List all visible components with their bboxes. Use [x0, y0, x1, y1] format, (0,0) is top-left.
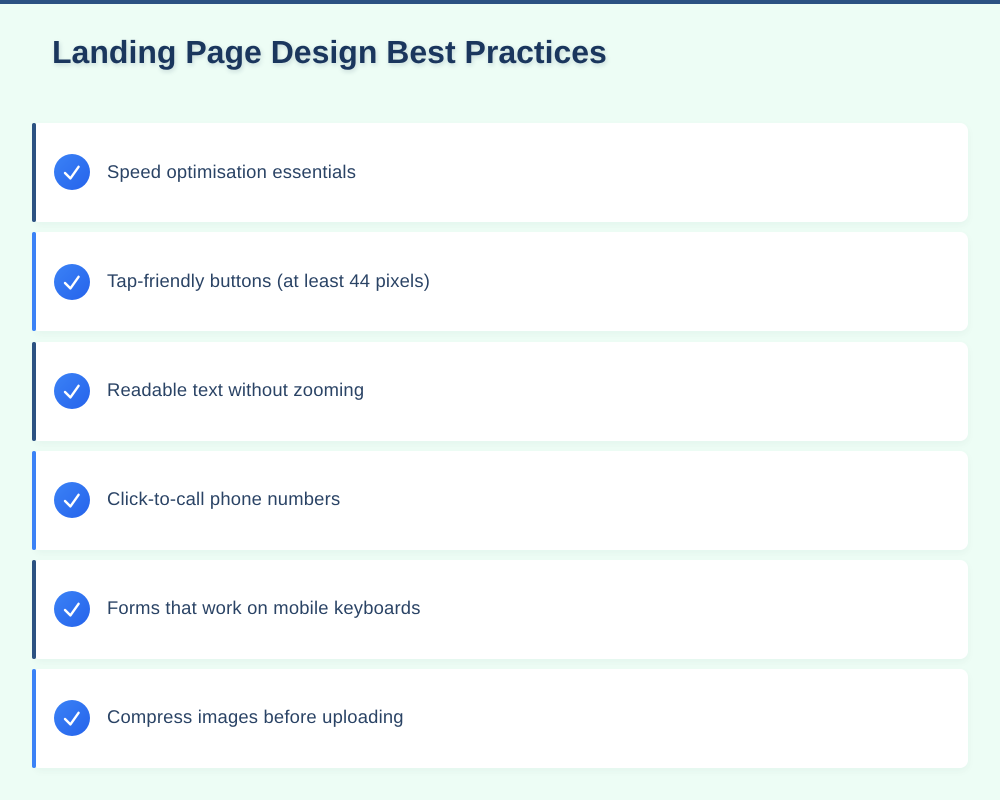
- icon: check: [54, 591, 90, 627]
- panel: item 5: [32, 560, 968, 659]
- text: item 5: Forms that work on mobile keyboards: [107, 597, 421, 618]
- icon: check: [54, 373, 90, 409]
- panel: item 3: [32, 342, 968, 441]
- panel: item 4: [32, 451, 968, 550]
- icon: check: [54, 264, 90, 300]
- icon: check: [54, 154, 90, 190]
- icon: check: [54, 482, 90, 518]
- title: Landing Page Design Best Practices: [52, 34, 607, 70]
- icon: check: [54, 700, 90, 736]
- text: item 1: Speed optimisation essentials: [107, 161, 356, 182]
- panel: item 2: [32, 232, 968, 331]
- text: item 4: Click-to-call phone numbers: [107, 488, 340, 509]
- top bar: [0, 0, 1000, 4]
- text: item 2: Tap-friendly buttons (at least 44 pixels): [107, 270, 430, 291]
- text: item 3: Readable text without zooming: [107, 379, 364, 400]
- text: item 6: Compress images before uploading: [107, 706, 404, 727]
- panel: item 6: [32, 669, 968, 768]
- panel: item 1: [32, 123, 968, 222]
